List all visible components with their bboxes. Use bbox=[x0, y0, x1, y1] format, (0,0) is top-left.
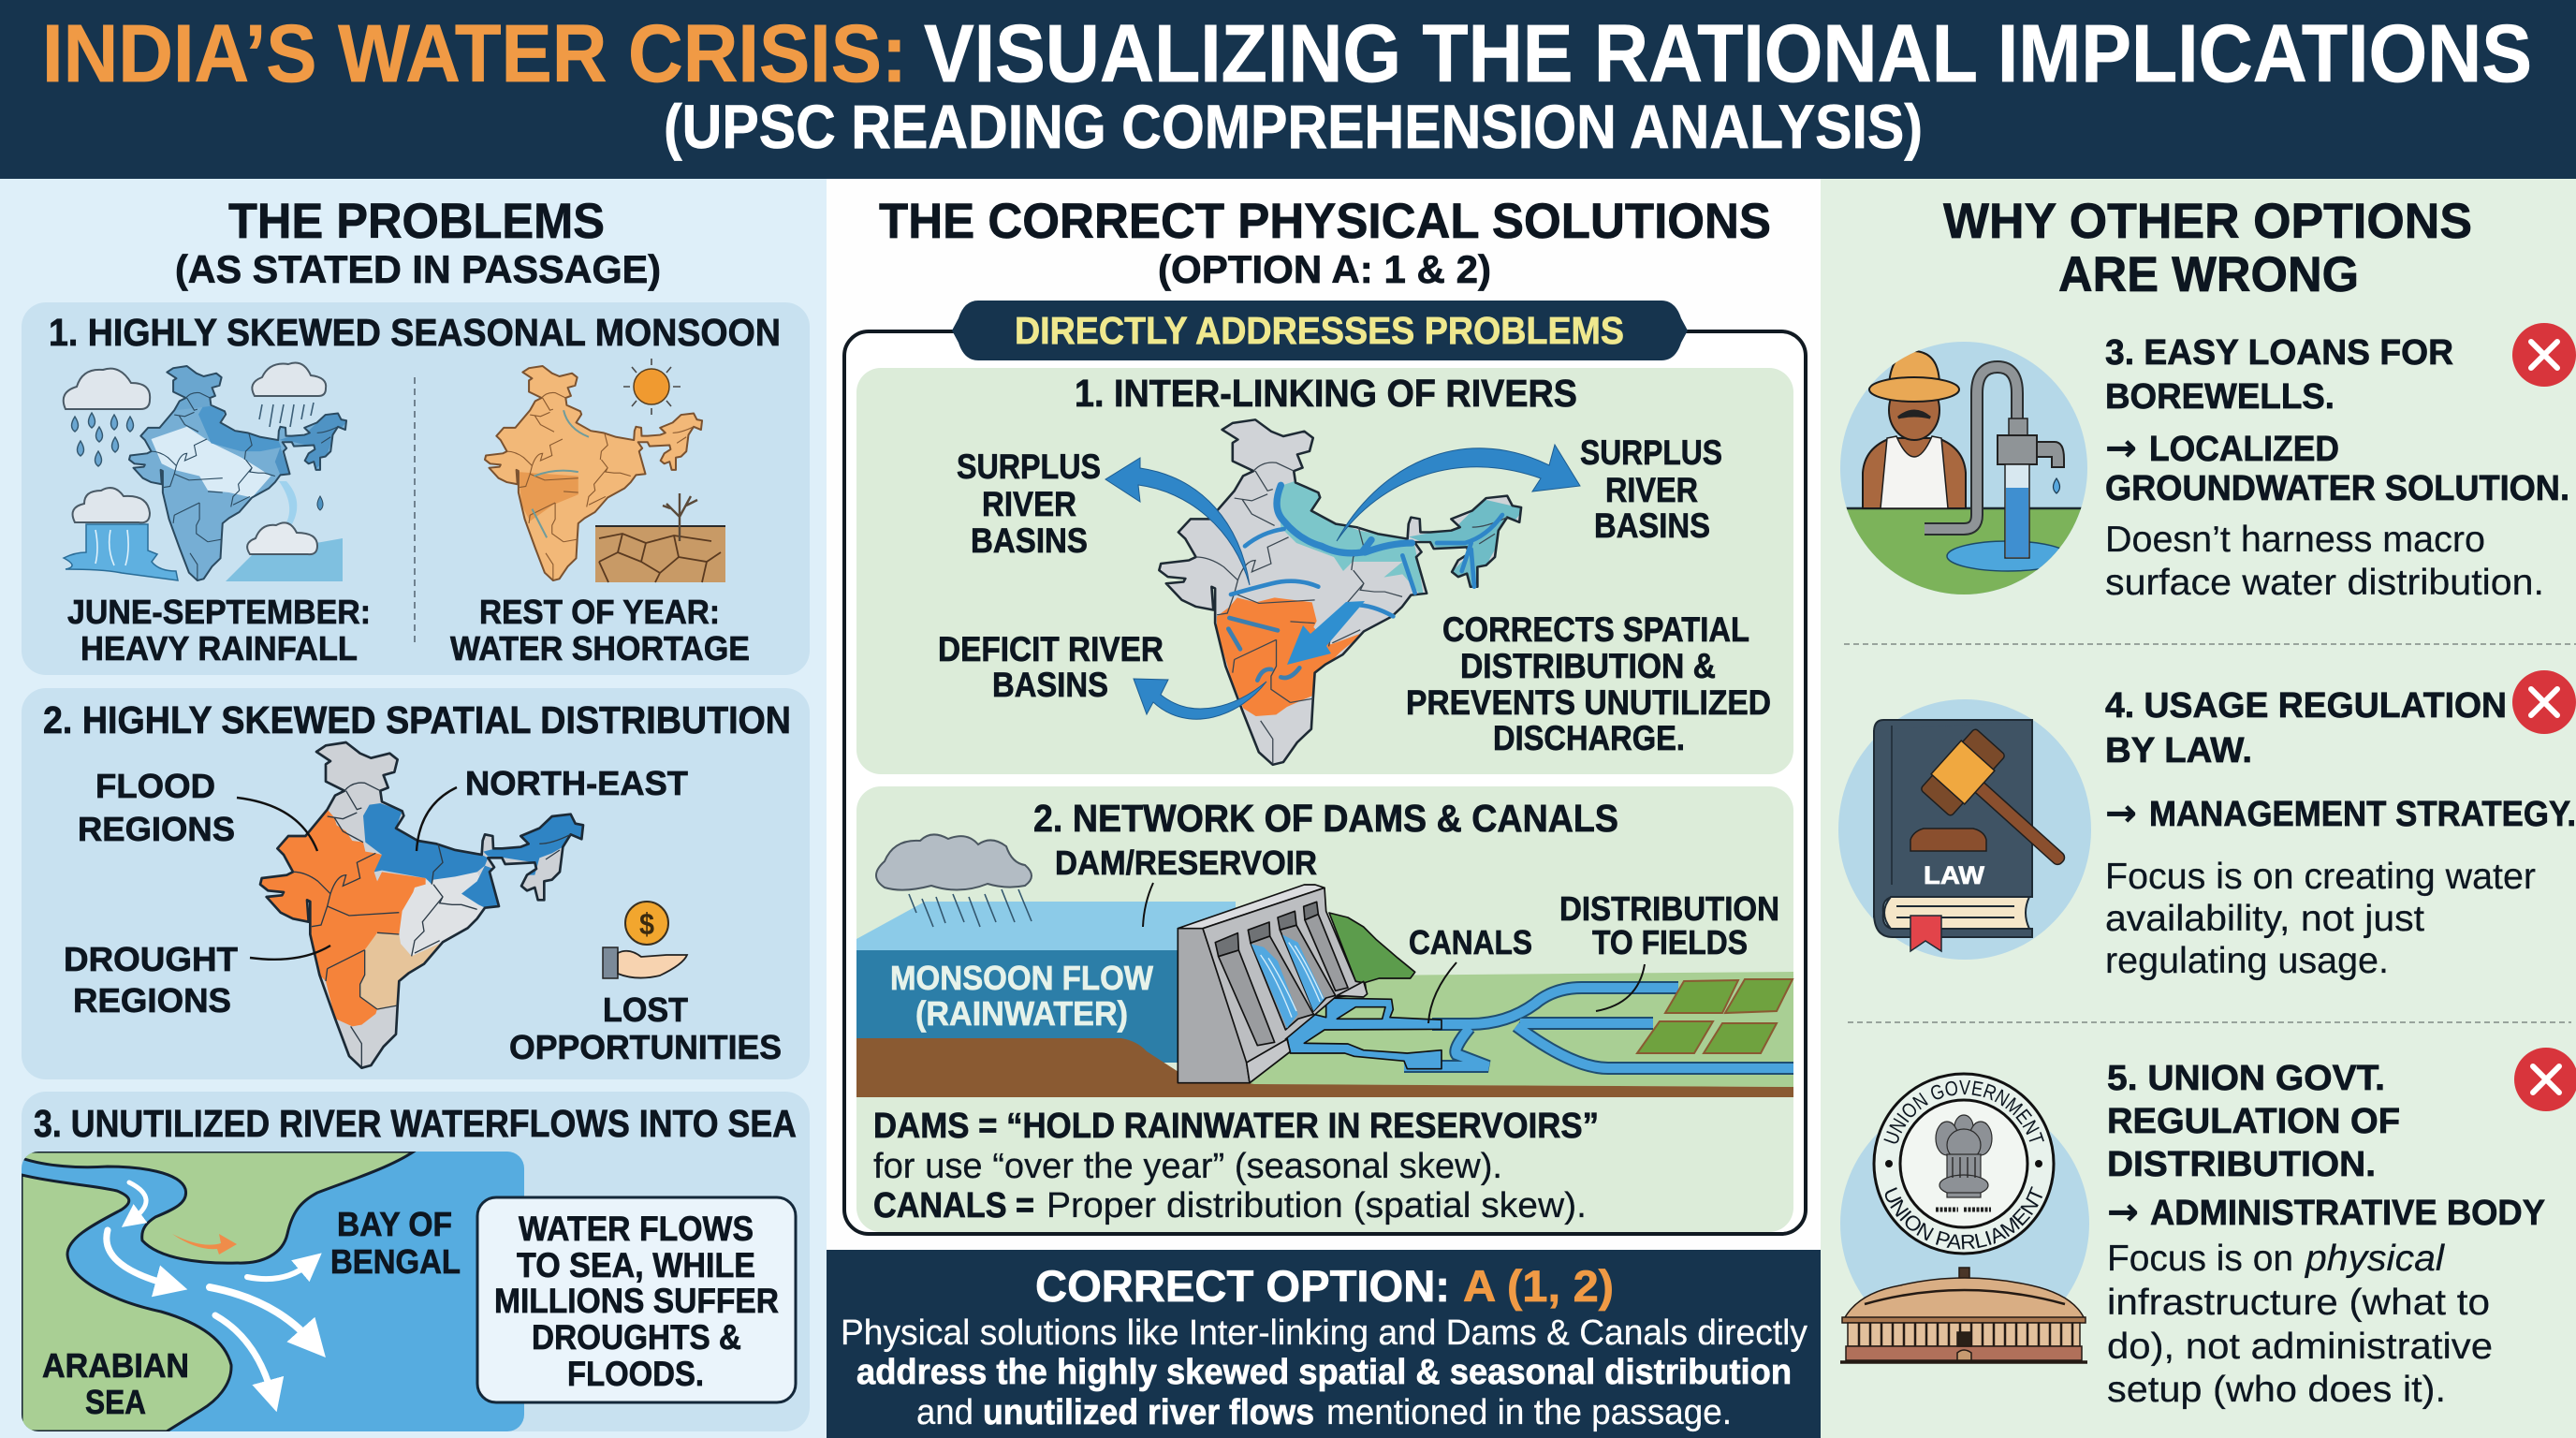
option 5 text: DISTRIBUTION. bbox=[2107, 1145, 2376, 1184]
separator bbox=[1848, 1021, 2571, 1023]
divider bbox=[414, 377, 416, 643]
callout: water flows to sea: WATER FLOWS bbox=[519, 1210, 754, 1248]
label: drought regions: DROUGHT bbox=[64, 940, 238, 978]
label: dam/reservoir bbox=[1055, 844, 1317, 927]
parliament bbox=[1840, 1268, 2087, 1362]
heading bbox=[1943, 194, 2472, 302]
label: surplus left: RIVER bbox=[982, 485, 1076, 523]
pipe bbox=[1925, 367, 2017, 529]
correct option panel bbox=[827, 1250, 1821, 1438]
map: monsoon india bbox=[129, 365, 348, 580]
label: rest of year: REST OF YEAR: bbox=[479, 593, 720, 631]
title line 1: INDIA’S WATER CRISIS: bbox=[42, 8, 907, 99]
icon: law book and gavel bbox=[1838, 699, 2091, 960]
heading: the problems: THE PROBLEMS bbox=[228, 194, 605, 249]
option 5 text: do), not administrative bbox=[2107, 1327, 2493, 1367]
option 5 text: setup (who does it). bbox=[2107, 1370, 2446, 1410]
seal: UNION GOVERNMENT bbox=[1883, 1080, 2044, 1144]
label: drought regions: REGIONS bbox=[73, 981, 231, 1020]
label: north-east: NORTH-EAST bbox=[465, 764, 688, 802]
option 4 text: Focus is on creating water bbox=[2105, 857, 2536, 897]
explanation bbox=[841, 1313, 1808, 1432]
icon: sun bbox=[623, 359, 681, 415]
label: bay of bengal: BENGAL bbox=[330, 1242, 461, 1281]
callout: water flows to sea: TO SEA, WHILE bbox=[517, 1246, 755, 1284]
map: flood and drought regions bbox=[258, 742, 585, 1068]
icon: wrong mark 5 bbox=[2514, 1048, 2576, 1111]
book label: LAW bbox=[1924, 861, 1985, 889]
text: corrects spatial distribution: DISCHARGE. bbox=[1493, 719, 1685, 757]
label: dam/reservoir: DAM/RESERVOIR bbox=[1055, 844, 1317, 882]
label: surplus right: RIVER bbox=[1605, 471, 1698, 509]
text: corrects spatial distribution: PREVENTS UNUTILIZED bbox=[1406, 683, 1771, 722]
pump bbox=[2009, 418, 2027, 437]
card: spatial distribution bbox=[22, 688, 810, 1079]
card title: 1. HIGHLY SKEWED SEASONAL MONSOON bbox=[49, 311, 781, 354]
option 4 text: 4. USAGE REGULATION bbox=[2105, 686, 2507, 726]
callout: water flows to sea: DROUGHTS & bbox=[532, 1318, 741, 1357]
icon: cracked earth and dead tree bbox=[595, 493, 725, 582]
text: dams and canals explanation bbox=[873, 1107, 1599, 1225]
heading: the problems bbox=[175, 194, 661, 291]
heading: ARE WRONG bbox=[2058, 247, 2359, 302]
card: unutilized river bbox=[22, 1092, 810, 1431]
label: flood regions: REGIONS bbox=[78, 810, 235, 848]
arrow: to deficit basin bbox=[1134, 679, 1266, 719]
label: deficit basins: DEFICIT RIVER bbox=[938, 630, 1164, 668]
river delta illustration bbox=[22, 1152, 524, 1431]
icon: wrong mark 3 bbox=[2512, 323, 2576, 387]
card: inter-linking of rivers bbox=[856, 368, 1793, 774]
explanation: mentioned in the passage. bbox=[1326, 1393, 1732, 1432]
dam structure bbox=[1178, 885, 1442, 1083]
straw hat bbox=[1889, 351, 1939, 386]
option 4 text: availability, not just bbox=[2105, 899, 2424, 939]
option 4 text: BY LAW. bbox=[2105, 731, 2252, 770]
heading: correct solutions: (OPTION A: 1 & 2) bbox=[1158, 247, 1491, 291]
card title: 2. HIGHLY SKEWED SPATIAL DISTRIBUTION bbox=[43, 698, 791, 741]
label: surplus left: SURPLUS bbox=[957, 448, 1101, 486]
rivers bbox=[1277, 485, 1412, 553]
farmer body bbox=[1863, 438, 1966, 508]
frame bbox=[844, 331, 1806, 1234]
label: lost opportunities: OPPORTUNITIES bbox=[509, 1028, 782, 1066]
option 4 text bbox=[2105, 686, 2576, 981]
callout: water flows to sea: FLOODS. bbox=[567, 1355, 704, 1393]
label: canals bbox=[1409, 923, 1532, 1023]
label: north-east bbox=[417, 764, 688, 851]
label: surplus right: BASINS bbox=[1594, 506, 1710, 545]
label: deficit basins: BASINS bbox=[992, 666, 1108, 704]
canals bbox=[1404, 988, 1793, 1068]
label: rest of year bbox=[450, 593, 750, 668]
label: bay of bengal bbox=[330, 1205, 461, 1281]
label: monsoon flow: (RAINWATER) bbox=[915, 994, 1128, 1033]
label: june-september: JUNE-SEPTEMBER: bbox=[67, 593, 371, 631]
option 5 text: physical bbox=[2305, 1239, 2445, 1279]
explanation: and bbox=[916, 1393, 973, 1432]
option 3 text: LOCALIZED bbox=[2149, 430, 2339, 469]
icon: sea and cloud bbox=[226, 481, 343, 581]
option 5 text bbox=[2107, 1059, 2545, 1410]
text: dams and canals explanation: CANALS = bbox=[873, 1186, 1034, 1225]
card: seasonal monsoon bbox=[22, 302, 810, 675]
option 3 text: → bbox=[2105, 427, 2137, 470]
label: rest of year: WATER SHORTAGE bbox=[450, 629, 750, 668]
option 3 text: surface water distribution. bbox=[2105, 563, 2544, 603]
text: corrects spatial distribution bbox=[1406, 610, 1771, 757]
text: dams and canals explanation: Proper distribution (spatial skew). bbox=[1046, 1186, 1587, 1225]
label: drought regions bbox=[64, 940, 330, 1020]
map: dry india bbox=[485, 366, 702, 580]
heading: the problems: (AS STATED IN PASSAGE) bbox=[175, 247, 661, 291]
label: surplus right bbox=[1580, 433, 1722, 545]
icon: rain cloud right bbox=[252, 363, 326, 427]
option 4 text: → bbox=[2105, 792, 2137, 835]
orange arrow bbox=[172, 1234, 237, 1255]
icon: farmer with borewell bbox=[1835, 342, 2097, 602]
option 3 text: Doesn’t harness macro bbox=[2105, 520, 2485, 560]
gavel bbox=[1919, 726, 2090, 892]
label: surplus left bbox=[957, 448, 1101, 560]
explanation: unutilized river flows bbox=[983, 1393, 1314, 1432]
label: flood regions: FLOOD bbox=[95, 767, 215, 805]
callout: water flows to sea bbox=[477, 1197, 796, 1402]
text: dams and canals explanation: for use “over the year” (seasonal skew). bbox=[873, 1147, 1502, 1186]
option 5 text: 5. UNION GOVT. bbox=[2107, 1059, 2385, 1098]
explanation: address the highly skewed spatial & seasonal distribution bbox=[856, 1353, 1792, 1392]
label: distribution to fields: TO FIELDS bbox=[1592, 923, 1748, 961]
header banner bbox=[0, 0, 2576, 179]
map: river linking bbox=[1159, 419, 1524, 765]
heading: correct solutions bbox=[879, 194, 1771, 291]
separator bbox=[1844, 643, 2576, 645]
label: surplus right: SURPLUS bbox=[1580, 433, 1722, 472]
heading: correct solutions: THE CORRECT PHYSICAL SOLUTIONS bbox=[879, 194, 1771, 249]
label: bay of bengal: BAY OF bbox=[337, 1205, 452, 1243]
label: monsoon flow: MONSOON FLOW bbox=[890, 959, 1153, 997]
text: corrects spatial distribution: CORRECTS SPATIAL bbox=[1442, 610, 1749, 649]
panel: the problems bbox=[22, 194, 810, 1431]
panel: why other options are wrong bbox=[1838, 194, 2576, 1410]
correct option heading: CORRECT OPTION: bbox=[1035, 1261, 1450, 1311]
option 5 text: Focus is on bbox=[2107, 1239, 2293, 1279]
icon: coin in hand bbox=[603, 902, 687, 978]
label: canals: CANALS bbox=[1409, 923, 1532, 961]
correct option heading: A (1, 2) bbox=[1463, 1261, 1614, 1311]
panel: correct physical solutions bbox=[827, 194, 1821, 1438]
label: arabian sea: ARABIAN bbox=[42, 1346, 189, 1385]
label: flood regions bbox=[78, 767, 317, 851]
label: june-september bbox=[67, 593, 371, 668]
seal bbox=[1872, 1073, 2056, 1255]
title line 2: (UPSC READING COMPREHENSION ANALYSIS) bbox=[664, 92, 1923, 161]
icon: rain cloud left bbox=[64, 369, 150, 466]
arrow: to surplus basin right bbox=[1337, 445, 1580, 541]
icon: wrong mark 4 bbox=[2512, 670, 2576, 734]
explanation: Physical solutions like Inter-linking and Dams & Canals directly bbox=[841, 1313, 1808, 1353]
callout: water flows to sea: MILLIONS SUFFER bbox=[494, 1282, 779, 1320]
rice fields bbox=[1637, 979, 1793, 1053]
option 5 text: ADMINISTRATIVE BODY bbox=[2150, 1194, 2545, 1233]
option 5 text: → bbox=[2107, 1191, 2139, 1234]
option 5 text: infrastructure (what to bbox=[2107, 1283, 2490, 1323]
label: distribution to fields: DISTRIBUTION bbox=[1559, 889, 1779, 928]
storm cloud bbox=[876, 834, 1032, 890]
label: monsoon flow bbox=[890, 959, 1153, 1033]
label: lost opportunities bbox=[509, 990, 782, 1066]
option 3 text bbox=[2105, 333, 2569, 603]
dam illustration bbox=[856, 834, 1793, 1097]
option 3 text: BOREWELLS. bbox=[2105, 377, 2334, 417]
icon: union government seal and parliament bbox=[1840, 1073, 2089, 1364]
card title: 1. INTER-LINKING OF RIVERS bbox=[1075, 372, 1577, 415]
arrow: into deficit south bbox=[1287, 601, 1365, 665]
icon: coin in hand: $ bbox=[639, 907, 654, 941]
label: arabian sea bbox=[42, 1346, 189, 1421]
card: dams and canals bbox=[856, 786, 1793, 1232]
badge: directly addresses problems bbox=[952, 301, 1688, 360]
card title: 2. NETWORK OF DAMS & CANALS bbox=[1033, 797, 1618, 840]
arrow: to surplus basin left bbox=[1105, 458, 1250, 585]
card title: 3. UNUTILIZED RIVER WATERFLOWS INTO SEA bbox=[34, 1102, 797, 1145]
option 4 text: regulating usage. bbox=[2105, 941, 2389, 981]
text: dams and canals explanation: DAMS = “HOLD RAINWATER IN RESERVOIRS” bbox=[873, 1107, 1599, 1146]
label: surplus left: BASINS bbox=[971, 521, 1088, 560]
label: deficit basins bbox=[938, 630, 1164, 704]
emblem bbox=[1936, 1115, 1992, 1197]
heading: WHY OTHER OPTIONS bbox=[1943, 194, 2472, 249]
text: corrects spatial distribution: DISTRIBUTION & bbox=[1460, 647, 1716, 685]
flow arrows bbox=[107, 1182, 311, 1393]
label: lost opportunities: LOST bbox=[603, 990, 688, 1029]
label: june-september: HEAVY RAINFALL bbox=[80, 629, 358, 668]
label: arabian sea: SEA bbox=[85, 1383, 146, 1421]
option 5 text: REGULATION OF bbox=[2107, 1102, 2400, 1141]
label: distribution to fields bbox=[1559, 889, 1779, 1011]
option 3 text: 3. EASY LOANS FOR bbox=[2105, 333, 2453, 373]
title line 1 bbox=[42, 8, 2532, 99]
badge: directly addresses problems: DIRECTLY ADDRESSES PROBLEMS bbox=[1015, 309, 1624, 352]
seal: UNION PARLIAMENT bbox=[1885, 1186, 2042, 1249]
icon: flood cloud bbox=[64, 488, 178, 580]
